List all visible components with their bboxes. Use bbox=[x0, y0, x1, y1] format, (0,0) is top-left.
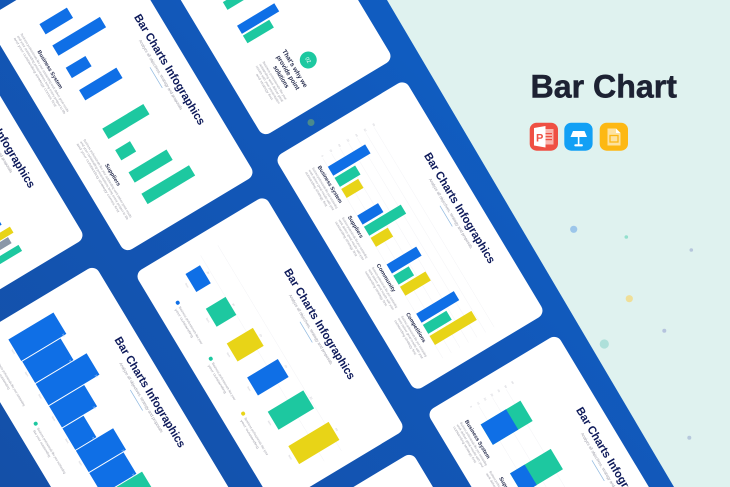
axis ticks: 30 bbox=[346, 138, 351, 143]
axis ticks: 40 bbox=[354, 133, 359, 138]
stacked bar: suppliers bbox=[510, 449, 563, 487]
column chart bbox=[185, 250, 339, 464]
labels and descriptions: Business professionals like your outstanding bbox=[400, 315, 428, 358]
labels and descriptions: Business System bbox=[36, 49, 63, 90]
legend: blue bbox=[171, 300, 204, 348]
axis ticks: 20 bbox=[483, 397, 488, 402]
panel: card six bars bbox=[135, 195, 405, 487]
icon: google slides bbox=[600, 123, 628, 151]
grid lines bbox=[323, 127, 494, 358]
card heading: Analyze all objectives, strategy and proposals bbox=[118, 361, 164, 433]
legend text: left bbox=[0, 353, 27, 409]
column chart bbox=[8, 309, 166, 487]
value labels: 20 bbox=[61, 333, 66, 338]
labels and descriptions: outstanding strategy first bbox=[304, 171, 328, 207]
value labels: 20 bbox=[121, 449, 126, 454]
panel: card suppliers bbox=[0, 0, 255, 253]
bar group bbox=[0, 216, 24, 277]
labels and descriptions: Business professionals like your outstanding bbox=[341, 217, 369, 259]
value labels: 20 bbox=[94, 374, 99, 379]
text block: provide point bbox=[275, 54, 301, 92]
value labels: 20 bbox=[92, 405, 97, 410]
bar group bbox=[217, 0, 291, 43]
panel: card bottom partial bbox=[282, 452, 552, 487]
value and caption labels: 20 bbox=[334, 427, 339, 432]
labels and descriptions: work deliver great results with your bbox=[308, 169, 336, 212]
labels and descriptions: work deliver great results with your bbox=[367, 268, 395, 311]
column captions: Item bbox=[51, 415, 57, 422]
labels and descriptions bbox=[12, 29, 139, 223]
value and caption labels bbox=[184, 254, 340, 460]
icon: keynote bbox=[564, 123, 593, 151]
text block: Business professionals like your bbox=[262, 61, 288, 101]
labels and descriptions: and your outstanding presentations bring every project to life bbox=[16, 35, 67, 115]
bar group: business system bbox=[328, 144, 384, 198]
value and caption labels: Item bbox=[267, 420, 273, 426]
value and caption labels: 20 bbox=[206, 270, 211, 275]
bar group: green bbox=[102, 100, 195, 204]
value and caption labels: Item bbox=[184, 282, 190, 288]
value and caption labels: 20 bbox=[258, 333, 264, 338]
icon: powerpoint bbox=[530, 123, 558, 151]
labels: outstanding strategy first bbox=[452, 426, 477, 464]
labels and descriptions: Business professionals like your outstanding work deliver great results bbox=[20, 33, 70, 113]
decorative floating dots bbox=[570, 226, 693, 440]
labels: Business professionals like your outstanding bbox=[459, 421, 488, 466]
value labels: 20 bbox=[91, 436, 96, 441]
legend: yellow: your outstanding bbox=[240, 419, 260, 450]
text block: and strategy first bbox=[255, 73, 274, 101]
text block bbox=[251, 48, 309, 107]
labels and descriptions: Business professionals like your outstanding work deliver great results bbox=[83, 138, 133, 219]
card heading: Analyze all objectives, strategy and proposals bbox=[138, 39, 184, 111]
labels and descriptions: and your outstanding presentations bring every project to life bbox=[79, 140, 130, 221]
card heading: Bar Charts Infographics bbox=[421, 151, 497, 266]
column captions: Item bbox=[10, 348, 16, 355]
labels and descriptions: and your outstanding strategy comes first bbox=[76, 143, 120, 213]
labels and descriptions: Suppliers bbox=[103, 163, 121, 187]
labels and descriptions: Competitions bbox=[404, 312, 427, 344]
legend text: green: Business professionals like your outstanding bbox=[36, 427, 67, 475]
value and caption labels: Item bbox=[287, 454, 293, 460]
labels and descriptions: and your outstanding strategy comes first bbox=[13, 37, 57, 108]
legend: blue: Business professionals like your bbox=[178, 306, 204, 346]
text block: results with your presentation bbox=[255, 65, 281, 105]
axis ticks: 10 bbox=[328, 148, 334, 153]
axis ticks: 0 bbox=[469, 405, 473, 409]
legend: yellow bbox=[236, 411, 270, 459]
panel: card big blue columns bbox=[0, 265, 235, 487]
labels and descriptions: work deliver great results with your bbox=[397, 317, 425, 360]
grid lines bbox=[201, 245, 341, 461]
panel: card left bbox=[0, 4, 85, 316]
labels and descriptions bbox=[304, 164, 434, 362]
labels and descriptions: outstanding strategy first bbox=[364, 270, 388, 307]
number badge: 02 bbox=[303, 56, 312, 65]
title: Bar Chart bbox=[530, 68, 677, 104]
legend: green: your outstanding bbox=[207, 364, 228, 394]
value and caption labels: Item bbox=[246, 385, 252, 392]
axis ticks bbox=[469, 380, 515, 410]
axis ticks: 50 bbox=[363, 128, 368, 133]
legend: green: Business professionals like your bbox=[211, 362, 237, 402]
text block: That's why we bbox=[280, 49, 309, 89]
panel: card main bbox=[275, 79, 545, 392]
value labels: 20 bbox=[68, 359, 73, 364]
card heading: Analyze all objectives, strategy and proposals bbox=[428, 177, 474, 249]
value and caption labels: Item bbox=[226, 351, 232, 358]
axis ticks: 30 bbox=[490, 393, 495, 398]
legend text: green bbox=[29, 421, 67, 477]
axis ticks: 60 bbox=[510, 380, 515, 385]
labels and descriptions: Business professionals like your outstanding bbox=[311, 167, 339, 209]
labels and descriptions: Business professionals like your outstanding bbox=[371, 266, 399, 309]
axis ticks: 10 bbox=[476, 401, 481, 406]
bar group: community bbox=[387, 247, 435, 296]
column captions: Item bbox=[77, 460, 83, 466]
stacked bar: business system bbox=[481, 401, 533, 445]
column captions: Item bbox=[64, 438, 70, 444]
card heading: Bar Charts Infographics bbox=[281, 267, 357, 382]
legend: green bbox=[204, 356, 238, 404]
labels bbox=[452, 418, 523, 487]
legend: blue: your outstanding bbox=[174, 308, 194, 339]
value and caption labels: Item bbox=[205, 317, 211, 323]
card heading: Bar Charts Infographics bbox=[131, 12, 207, 127]
card heading: Bar Charts Infographics bbox=[112, 335, 187, 450]
card heading: Analyze all objectives, strategy and proposals bbox=[288, 293, 334, 365]
panel: card why we provide bbox=[123, 0, 393, 137]
axis ticks: 60 bbox=[371, 123, 377, 128]
text block: outstanding work deliver great bbox=[258, 63, 284, 103]
axis ticks: 40 bbox=[496, 389, 502, 394]
axis ticks bbox=[320, 123, 377, 158]
labels and descriptions: outstanding strategy first bbox=[393, 319, 417, 356]
column captions bbox=[10, 348, 83, 466]
grid lines bbox=[479, 389, 628, 487]
column captions: Item bbox=[24, 371, 30, 377]
legend text: green: like your outstanding bbox=[32, 429, 52, 458]
value and caption labels: 20 bbox=[309, 396, 314, 401]
decorative dot on blue bbox=[308, 119, 314, 126]
axis ticks: 0 bbox=[320, 154, 325, 158]
labels and descriptions: outstanding strategy first bbox=[334, 221, 358, 257]
labels: Business System bbox=[463, 419, 491, 460]
column captions: Item bbox=[37, 393, 43, 399]
text block: solutions bbox=[271, 65, 290, 90]
icon: powerpoint: P bbox=[536, 132, 543, 144]
labels and descriptions: Business System bbox=[316, 165, 343, 205]
number badge bbox=[297, 48, 320, 72]
value and caption labels: 20 bbox=[284, 364, 289, 369]
panel: card stacked bars bbox=[427, 334, 697, 487]
value and caption labels: 20 bbox=[231, 302, 236, 307]
bar group: competitions bbox=[416, 289, 477, 345]
bar group: blue bbox=[39, 0, 133, 100]
labels and descriptions: Suppliers bbox=[346, 215, 364, 239]
labels and descriptions: Community bbox=[375, 263, 396, 293]
legend: yellow: Business professionals like your bbox=[243, 417, 270, 457]
labels: work deliver great results with your bbox=[456, 424, 485, 469]
bar group: suppliers bbox=[357, 193, 413, 247]
axis ticks: 50 bbox=[503, 384, 508, 389]
labels and descriptions: work deliver great results with your bbox=[338, 219, 366, 262]
axis ticks: 20 bbox=[337, 143, 342, 148]
value labels bbox=[37, 329, 153, 486]
value labels: 20 bbox=[131, 473, 136, 478]
